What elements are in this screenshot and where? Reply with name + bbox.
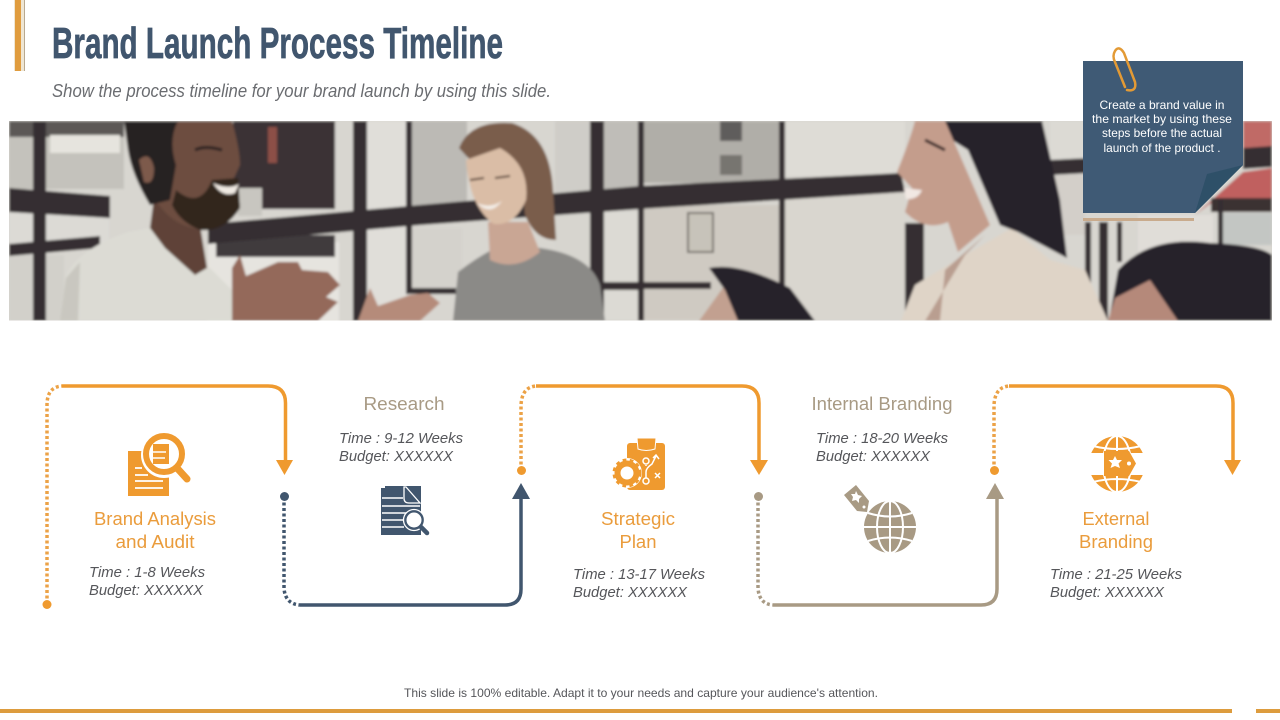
icon: globe with star tag — [1089, 436, 1145, 492]
photo background: window panes — [9, 121, 1272, 322]
arrow: step 4 tan — [754, 483, 1004, 605]
details: Budget: XXXXXX — [89, 582, 204, 599]
arrow: step 5 orange — [990, 386, 1241, 475]
arrow: step 2 navy — [280, 483, 530, 605]
woman in beige shirt — [897, 121, 1108, 321]
label — [94, 509, 216, 552]
callout text: the market by using these — [1092, 112, 1232, 126]
arrow: step 3 orange — [517, 386, 768, 475]
picture frame on wall — [688, 213, 713, 252]
callout text: steps before the actual — [1102, 126, 1222, 140]
label: Brand Analysis — [94, 509, 216, 529]
callout text: launch of the product . — [1104, 141, 1220, 155]
footer note: This slide is 100% editable. Adapt it to your needs and capture your audience's attention. — [404, 686, 878, 700]
details: Time : 1-8 Weeks — [89, 564, 205, 581]
arrow: step 1 orange — [42, 386, 293, 609]
left accent bar — [14, 0, 25, 71]
label: Branding — [1079, 532, 1153, 552]
details: Budget: XXXXXX — [573, 584, 688, 601]
man in white shirt — [60, 121, 440, 321]
details — [339, 430, 463, 465]
details — [1050, 566, 1182, 601]
details: Time : 21-25 Weeks — [1050, 566, 1182, 583]
step 1: brand analysis and audit — [89, 432, 216, 599]
subtitle: Show the process timeline for your brand launch by using this slide. — [52, 81, 551, 101]
icon: clipboard with gear and route — [612, 438, 665, 490]
details — [573, 566, 705, 601]
callout sticky note — [1083, 48, 1243, 221]
label — [601, 509, 675, 552]
label: and Audit — [116, 532, 194, 552]
details: Budget: XXXXXX — [816, 448, 931, 465]
icon: paper clip — [1114, 48, 1135, 90]
details: Time : 18-20 Weeks — [816, 430, 948, 447]
icon: report with magnifier — [381, 486, 427, 535]
photo background: dark window frames — [9, 121, 1272, 321]
label: Plan — [620, 532, 656, 552]
label: Strategic — [601, 509, 675, 529]
banner photo: team meeting — [0, 115, 1280, 325]
callout text — [1092, 98, 1232, 155]
details — [89, 564, 205, 599]
details: Budget: XXXXXX — [339, 448, 454, 465]
woman in striped top — [453, 123, 605, 321]
title: Brand Launch Process Timeline — [52, 19, 503, 68]
details — [816, 430, 948, 465]
icon: globe with tag — [844, 485, 916, 553]
details: Budget: XXXXXX — [1050, 584, 1165, 601]
label: Internal Branding — [812, 394, 952, 414]
seated heads at the bottom — [699, 242, 1272, 321]
label: Research — [364, 394, 444, 414]
callout text: Create a brand value in — [1100, 98, 1224, 112]
step 2: research — [339, 394, 463, 535]
details: Time : 13-17 Weeks — [573, 566, 705, 583]
label — [1079, 509, 1153, 552]
step 4: internal branding — [812, 394, 952, 553]
step 3: strategic plan — [573, 438, 705, 601]
label: External — [1082, 509, 1150, 529]
step 5: external branding — [1050, 436, 1182, 601]
footer bar — [0, 709, 1280, 713]
icon: document with magnifier — [128, 432, 187, 496]
details: Time : 9-12 Weeks — [339, 430, 463, 447]
